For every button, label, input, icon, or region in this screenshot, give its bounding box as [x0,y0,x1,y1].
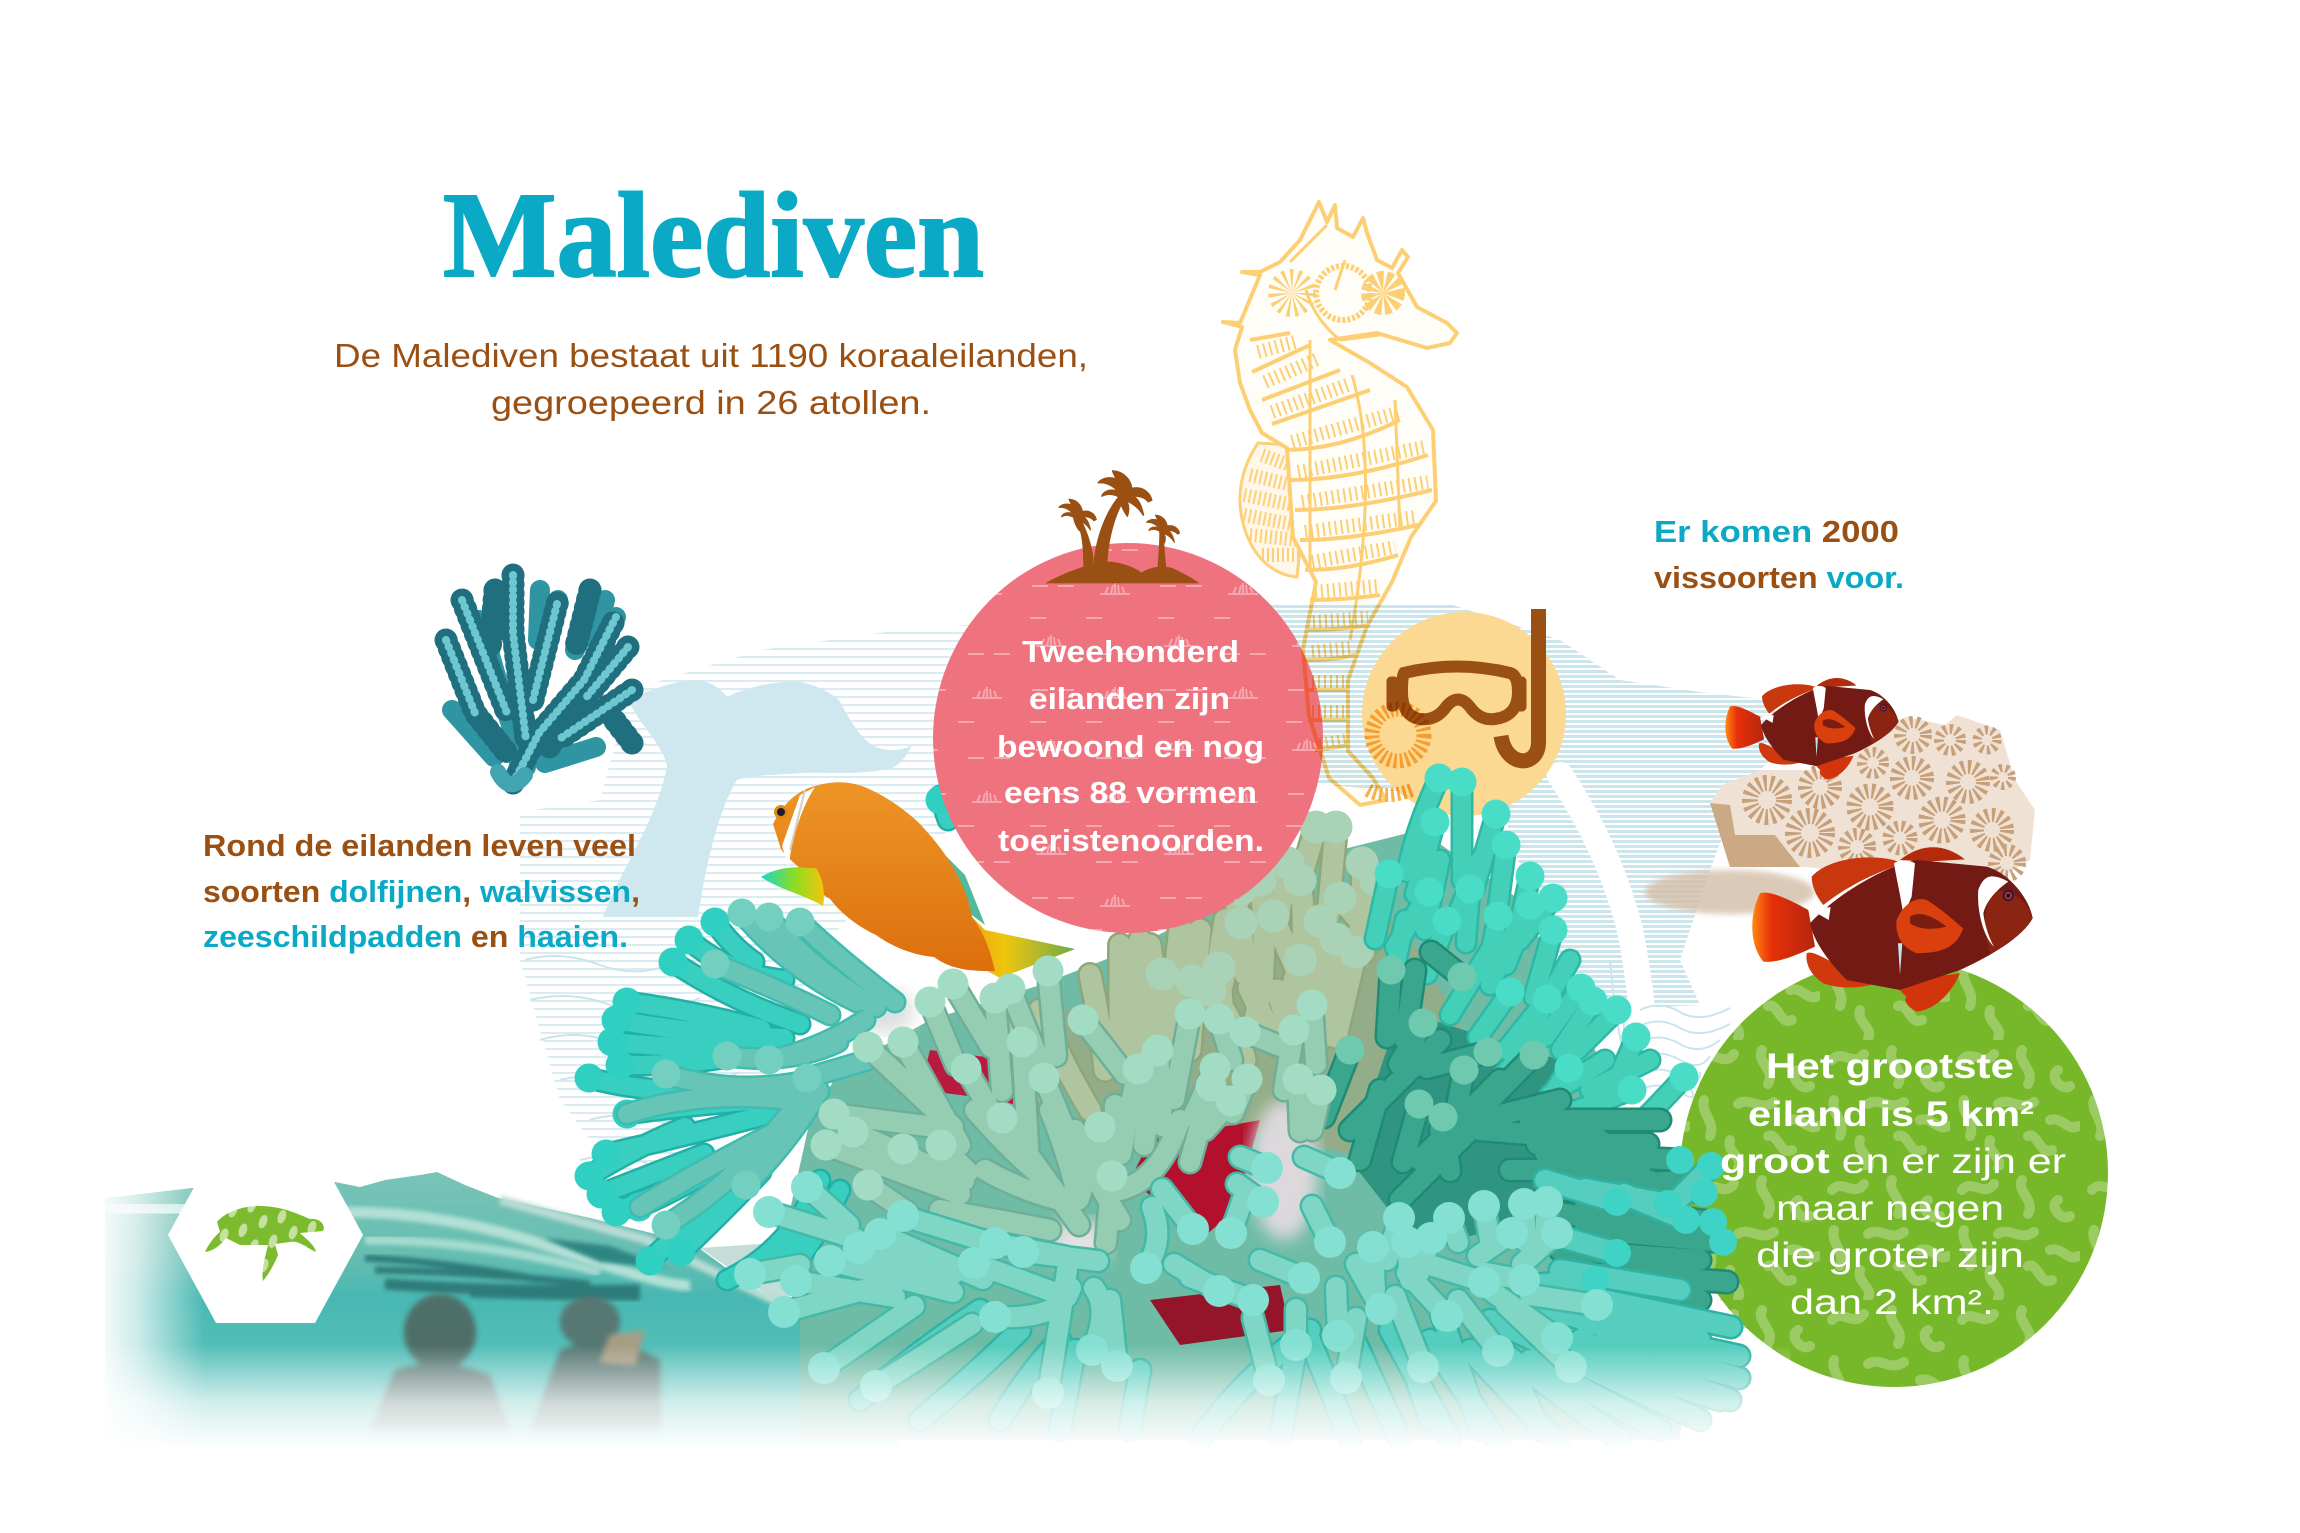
intro text [334,337,1088,421]
seahorse tail coil [1372,709,1424,761]
text: marine life: zeeschildpadden en haaien. [203,919,628,954]
title: Malediven [443,168,984,303]
red anemone core [920,1050,1060,1120]
text: pink circle: bewoond en nog [997,729,1264,764]
pink circle [933,543,1323,933]
text: pink circle [997,634,1264,858]
anemone right top tentacles [1375,778,1684,1153]
anemone bottom fade [90,1345,1790,1509]
seahorse illustration [1223,202,1457,805]
intro text: De Malediven bestaat uit 1190 koraaleilanden, [334,337,1088,374]
text: green circle [1720,1047,2066,1322]
icon: turtle [205,1206,324,1281]
whale tail [603,680,912,917]
divers [370,1294,662,1430]
anemone left front tentacles [627,913,895,1225]
background: engraved sea etching [520,604,1810,1340]
text: green circle: maar negen [1776,1189,2004,1228]
icon: snorkel and mask [1388,609,1538,761]
text: green circle: groot en er zijn er [1720,1142,2066,1181]
text: fish species: Er komen 2000 [1654,514,1899,549]
text: pink circle: toeristenoorden. [998,823,1264,858]
anemone centre front tentacles [826,971,1321,1243]
yellow circle [1362,612,1566,816]
text: green circle: eiland is 5 km² [1748,1095,2034,1134]
icon: palm island [1045,471,1199,583]
text: marine life: Rond de eilanden leven veel [203,828,636,863]
hexagon badge with turtle [168,1147,363,1323]
text: marine life [203,828,640,954]
red clownfish, small [1725,678,1898,779]
water with divers [95,1160,900,1460]
green circle [1680,959,2108,1387]
text: fish species: vissoorten voor. [1654,560,1904,595]
orange clownfish [761,782,1075,978]
anemone lower front tentacles [750,1157,1597,1393]
text: pink circle: eilanden zijn [1029,681,1230,716]
anemone centre back tentacles, olive [1000,827,1376,1110]
intro text: gegroepeerd in 26 atollen. [491,384,931,421]
coral illustration [446,575,632,784]
brown reef coral [1645,715,2035,914]
text: pink circle: Tweehonderd [1022,634,1239,669]
seahorse head details [1280,266,1394,320]
text: marine life: soorten dolfijnen, walvissen, [203,874,640,909]
anemone lower right tentacles [860,1160,1739,1445]
text: green circle: die groter zijn [1756,1236,2024,1275]
text: pink circle: eens 88 vormen [1004,775,1257,810]
anemone base [790,830,1690,1440]
anemone right mid tentacles [1324,952,1727,1300]
anemone back tentacles left [589,796,948,1280]
red clownfish, large [1752,847,2033,1012]
text: fish species [1654,514,1904,595]
text: green circle: dan 2 km². [1790,1283,1994,1322]
text: green circle: Het grootste [1766,1047,2014,1086]
